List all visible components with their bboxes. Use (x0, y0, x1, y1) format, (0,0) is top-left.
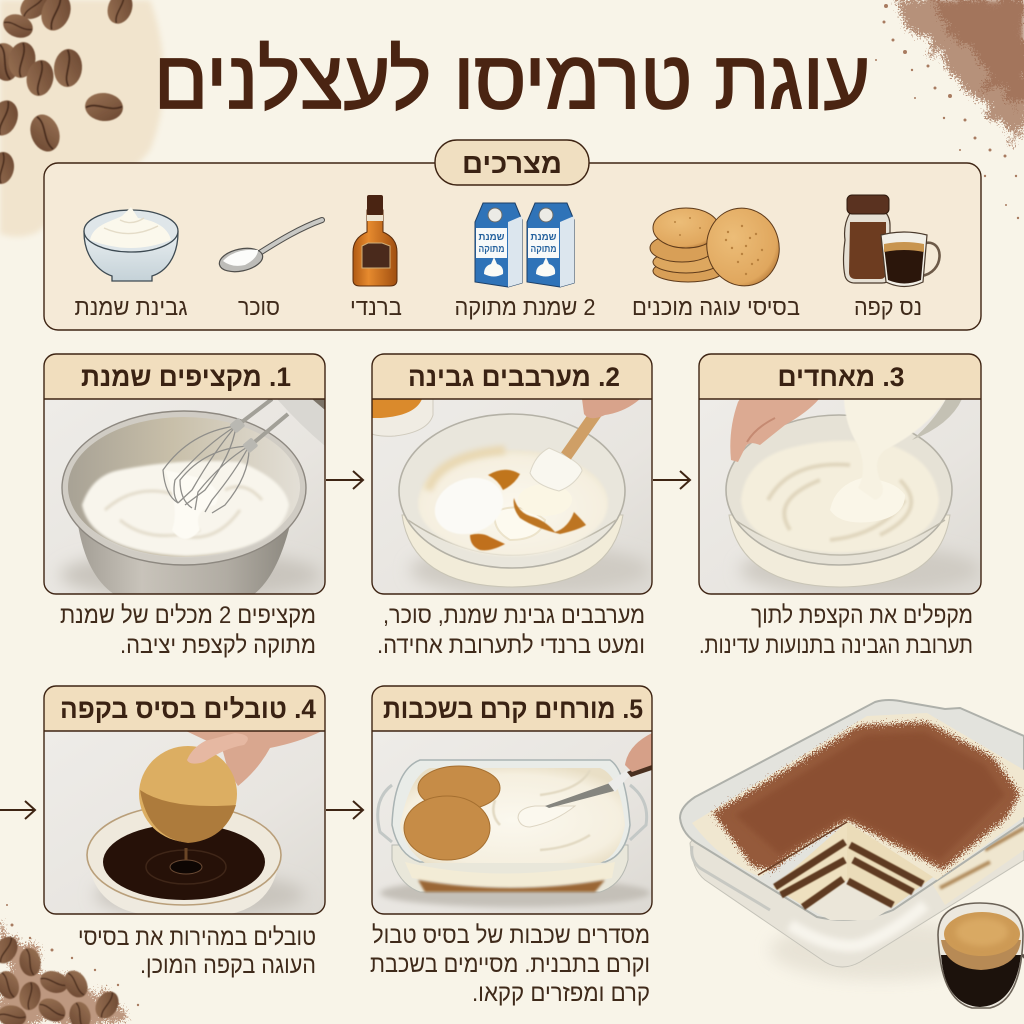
title: עוגת טרמיסו לעצלנים (154, 35, 870, 126)
step 4 header (44, 686, 325, 731)
step 2 photo: mixing cheese in glass bowl (372, 399, 652, 595)
step 3 divider (699, 398, 981, 400)
step 3 text (699, 602, 973, 659)
arrow: step 4 to step 5 (326, 801, 363, 819)
step 3 text: מקפלים את הקצפת לתוך (751, 602, 973, 629)
panel: step 3 (699, 354, 981, 659)
step 5 frame (372, 686, 652, 914)
step 5 header (372, 686, 652, 731)
espresso cup (938, 903, 1024, 1010)
ingredient labels: בסיסי עוגה מוכנים (632, 294, 800, 320)
panel: step 1 (44, 354, 325, 659)
decoration: cocoa powder top right (875, 0, 1024, 219)
step 5 divider (372, 730, 652, 732)
ingredient labels (74, 294, 922, 320)
icon: spoon with sugar (217, 220, 322, 275)
step 5 text: קרם ומפזרים קקאו. (472, 980, 650, 1007)
dish body and glass (690, 820, 1024, 967)
step 1 frame (44, 354, 325, 594)
icon: cream cartons (475, 203, 574, 287)
right carton (527, 203, 574, 287)
panel: step 2 (372, 354, 652, 659)
arrow: step 2 to step 3 (653, 471, 690, 489)
right carton: שמנת (530, 232, 557, 243)
step 3 frame (699, 354, 981, 594)
cut section with layers (758, 822, 933, 920)
left carton: שמנת (478, 232, 505, 243)
step 2 text: ומעט ברנדי לתערובת אחידה. (377, 632, 645, 659)
icon: bowl of cream cheese (84, 207, 178, 281)
step 2 divider (372, 398, 652, 400)
arrow: step 3 continues to step 4 (0, 801, 35, 819)
step 1 divider (44, 398, 325, 400)
step 4 frame (44, 686, 325, 914)
ingredient labels: גבינת שמנת (74, 294, 188, 320)
left carton: מתוקה (478, 244, 505, 255)
step 1 header: 1. מקציפים שמנת (81, 362, 291, 392)
decoration: coffee beans and cocoa bottom left (0, 904, 139, 1024)
step 5 text (370, 922, 650, 1007)
cocoa dusting (713, 722, 1020, 870)
step 4 photo: dipping biscuit in coffee (44, 731, 325, 917)
step 2 frame (372, 354, 652, 594)
ingredients heading pill: מצרכים (462, 148, 562, 179)
icon: biscuit stack (650, 200, 787, 294)
illustration: finished tiramisu in glass dish (680, 700, 1024, 1010)
ingredient labels: 2 שמנת מתוקה (454, 294, 596, 320)
step 2 header (372, 354, 652, 399)
step 1 text: מקציפים 2 מכלים של שמנת (60, 602, 316, 629)
step 3 photo: folding whipped cream (699, 399, 981, 595)
step 2 text (377, 602, 645, 659)
step 3 text: תערובת הגבינה בתנועות עדינות. (699, 632, 973, 659)
cream top (692, 713, 1024, 880)
arrow: step 3 to step 2 (326, 471, 363, 489)
step 4 text: העוגה בקפה המוכן. (140, 952, 316, 979)
step 2 header: 2. מערבבים גבינה (408, 362, 620, 392)
glass rim (680, 700, 1024, 920)
icon: instant coffee jar and glass (844, 195, 940, 286)
step 5 photo: spreading cream over biscuits (372, 731, 652, 914)
ingredients heading pill (435, 140, 589, 185)
panel: ingredients (44, 140, 981, 330)
step 4 text (78, 924, 316, 979)
step 4 divider (44, 730, 325, 732)
ingredient labels: נס קפה (854, 294, 922, 320)
step 1 photo: whipping cream in steel bowl (44, 399, 325, 600)
ingredient labels: ברנדי (350, 294, 402, 320)
step 4 header: 4. טובלים בסיס בקפה (60, 694, 316, 724)
left carton (475, 203, 522, 287)
step 3 header: 3. מאחדים (778, 362, 904, 392)
step 1 header (44, 354, 325, 399)
icon: brandy bottle (353, 195, 397, 286)
decoration: coffee beans top left (0, 0, 164, 237)
step 5 text: מסדרים שכבות של בסיס טבול (372, 922, 650, 949)
step 3 header (699, 354, 981, 399)
step 4 text: טובלים במהירות את בסיסי (78, 924, 316, 951)
step 1 text: מתוקה לקצפת יציבה. (120, 632, 316, 659)
panel: step 4 (44, 686, 325, 979)
ingredient labels: סוכר (238, 294, 280, 320)
step 1 text (60, 602, 316, 659)
step 5 text: וקרם בתבנית. מסיימים בשכבת (370, 951, 650, 978)
step 2 text: מערבבים גבינת שמנת, סוכר, (383, 602, 645, 629)
panel: step 5 (370, 686, 652, 1007)
step 5 header: 5. מורחים קרם בשכבות (383, 694, 643, 724)
right carton: מתוקה (530, 244, 557, 255)
